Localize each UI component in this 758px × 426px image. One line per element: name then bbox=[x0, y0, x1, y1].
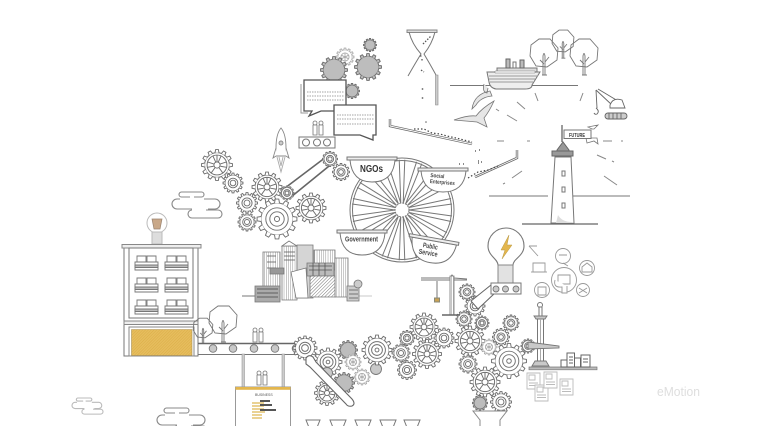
bowl: Social Enterprises: Enterprises bbox=[430, 179, 455, 187]
belt arm bbox=[285, 154, 334, 197]
icon: excavator bbox=[594, 89, 627, 119]
city skyline bbox=[242, 241, 372, 302]
icon: lightning bolt bbox=[501, 235, 512, 259]
panel: hotel building with bulb bbox=[122, 213, 201, 356]
arm bbox=[471, 285, 496, 309]
ship at sea bbox=[450, 59, 578, 89]
gear cluster: top hatched bbox=[321, 39, 381, 98]
birds bbox=[454, 84, 494, 127]
icon: wrench bbox=[306, 356, 354, 406]
speech bubble one bbox=[301, 80, 346, 116]
bowl: Social Enterprises: Social bbox=[430, 173, 445, 180]
icon: small bulb on the roof bbox=[147, 213, 167, 244]
gear cluster: lower left with wrench bbox=[293, 336, 382, 406]
roller box bbox=[299, 137, 335, 148]
icon: hourglass bbox=[407, 30, 438, 105]
people on the conveyor bbox=[253, 328, 263, 342]
bulb bbox=[488, 228, 524, 265]
kiosk with supports bbox=[236, 354, 290, 426]
spoked wheel bbox=[350, 158, 454, 262]
beds bbox=[135, 256, 188, 314]
platform bbox=[529, 367, 597, 370]
bowl: Public Service bbox=[405, 234, 459, 267]
trees top right bbox=[530, 30, 598, 75]
bowl: NGOs: NGOs bbox=[360, 164, 383, 175]
bowl: Government bbox=[337, 230, 387, 255]
sun rays bbox=[496, 93, 623, 185]
future flag bbox=[562, 125, 598, 144]
lighthouse bbox=[489, 125, 630, 224]
bowl: NGOs bbox=[347, 157, 397, 182]
icon: rocket bbox=[273, 128, 289, 172]
people on box bbox=[313, 121, 323, 135]
bowl: Public Service: Public bbox=[422, 242, 438, 252]
ramp: lower bbox=[468, 150, 517, 178]
particles between ramps bbox=[459, 150, 482, 164]
cloud: bottom bbox=[157, 408, 207, 426]
trees beside building bbox=[193, 306, 237, 343]
watermark: eMotion bbox=[657, 385, 700, 399]
small buildings bbox=[561, 353, 590, 367]
cloud: faded bottom left bbox=[72, 398, 103, 414]
speech bubble two bbox=[334, 105, 376, 140]
gear cluster: centre chain bbox=[362, 311, 535, 426]
arm bbox=[528, 342, 559, 349]
icon group: service circles bbox=[529, 246, 594, 298]
bowl: Public Service: Service bbox=[418, 249, 438, 259]
light bulb with arm bbox=[459, 228, 524, 316]
floor band bbox=[124, 321, 198, 324]
future flag: FUTURE bbox=[569, 133, 585, 139]
hoppers at the bottom bbox=[306, 420, 420, 426]
building roof bbox=[122, 244, 201, 248]
gear cluster: left upper with belt bbox=[202, 150, 349, 239]
documents bbox=[527, 372, 573, 401]
bulb base box bbox=[491, 283, 521, 294]
window panel bbox=[129, 248, 193, 318]
bowl: Social Enterprises bbox=[418, 168, 468, 192]
funnel under gears bbox=[473, 411, 507, 426]
bowl: Government: Government bbox=[345, 234, 378, 244]
crane bbox=[421, 275, 467, 315]
cloud: left middle bbox=[172, 192, 222, 218]
conveyor belt bbox=[198, 344, 301, 354]
building walls bbox=[124, 247, 198, 356]
kiosk with supports: BUSINESS bbox=[255, 393, 273, 397]
ramp: upper bbox=[390, 119, 472, 144]
gold garage door bbox=[129, 327, 194, 356]
monument column with platform bbox=[528, 302, 597, 370]
